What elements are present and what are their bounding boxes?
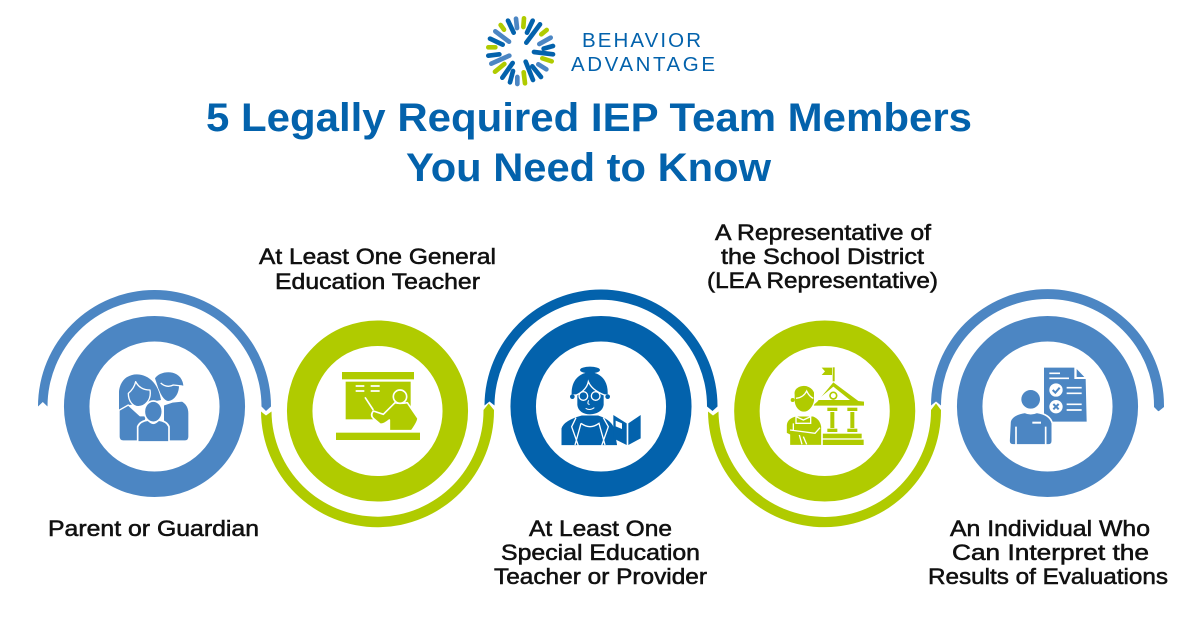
label: Results of Evaluations — [928, 564, 1168, 589]
label: the School District — [721, 244, 924, 269]
top arc — [931, 289, 1164, 411]
icon: teacher at board — [336, 372, 420, 440]
icon: family — [119, 372, 189, 442]
label: Parent or Guardian — [48, 516, 259, 541]
label — [259, 244, 496, 294]
icon: person with checklist — [1009, 368, 1087, 445]
title: 5 Legally Required IEP Team Members — [206, 96, 972, 140]
ring — [77, 329, 232, 484]
label: A Representative of — [715, 220, 932, 245]
step 3: special education teacher — [484, 290, 718, 589]
label — [928, 516, 1168, 589]
logo wordmark: ADVANTAGE — [571, 53, 715, 76]
title — [206, 96, 972, 190]
logo: Behavior Advantage — [488, 18, 715, 84]
step 5: evaluation interpreter — [928, 289, 1168, 589]
title: You Need to Know — [406, 146, 772, 190]
label: Education Teacher — [275, 269, 480, 294]
label: Can Interpret the — [952, 540, 1149, 565]
bottom arc — [261, 404, 494, 527]
ring — [970, 329, 1125, 484]
top arc — [484, 290, 718, 411]
step 1: parent or guardian — [38, 290, 271, 541]
label: Special Education — [501, 540, 700, 565]
label: At Least One — [529, 516, 672, 541]
bottom arc — [708, 404, 941, 527]
ring — [523, 329, 679, 484]
icon: teacher with book — [561, 367, 641, 446]
logo wordmark — [571, 29, 715, 76]
label: (LEA Representative) — [707, 268, 938, 293]
label — [494, 516, 707, 589]
step 2: general education teacher — [259, 244, 496, 527]
top arc — [38, 290, 271, 411]
label — [707, 220, 938, 293]
label: Teacher or Provider — [494, 564, 707, 589]
logo burst icon — [488, 18, 553, 84]
step 4: school district representative — [707, 220, 941, 527]
label: At Least One General — [259, 244, 496, 269]
ring — [300, 333, 455, 489]
icon: representative and school building — [786, 367, 864, 446]
label: An Individual Who — [950, 516, 1150, 541]
ring — [747, 333, 902, 489]
logo wordmark: BEHAVIOR — [582, 29, 701, 52]
